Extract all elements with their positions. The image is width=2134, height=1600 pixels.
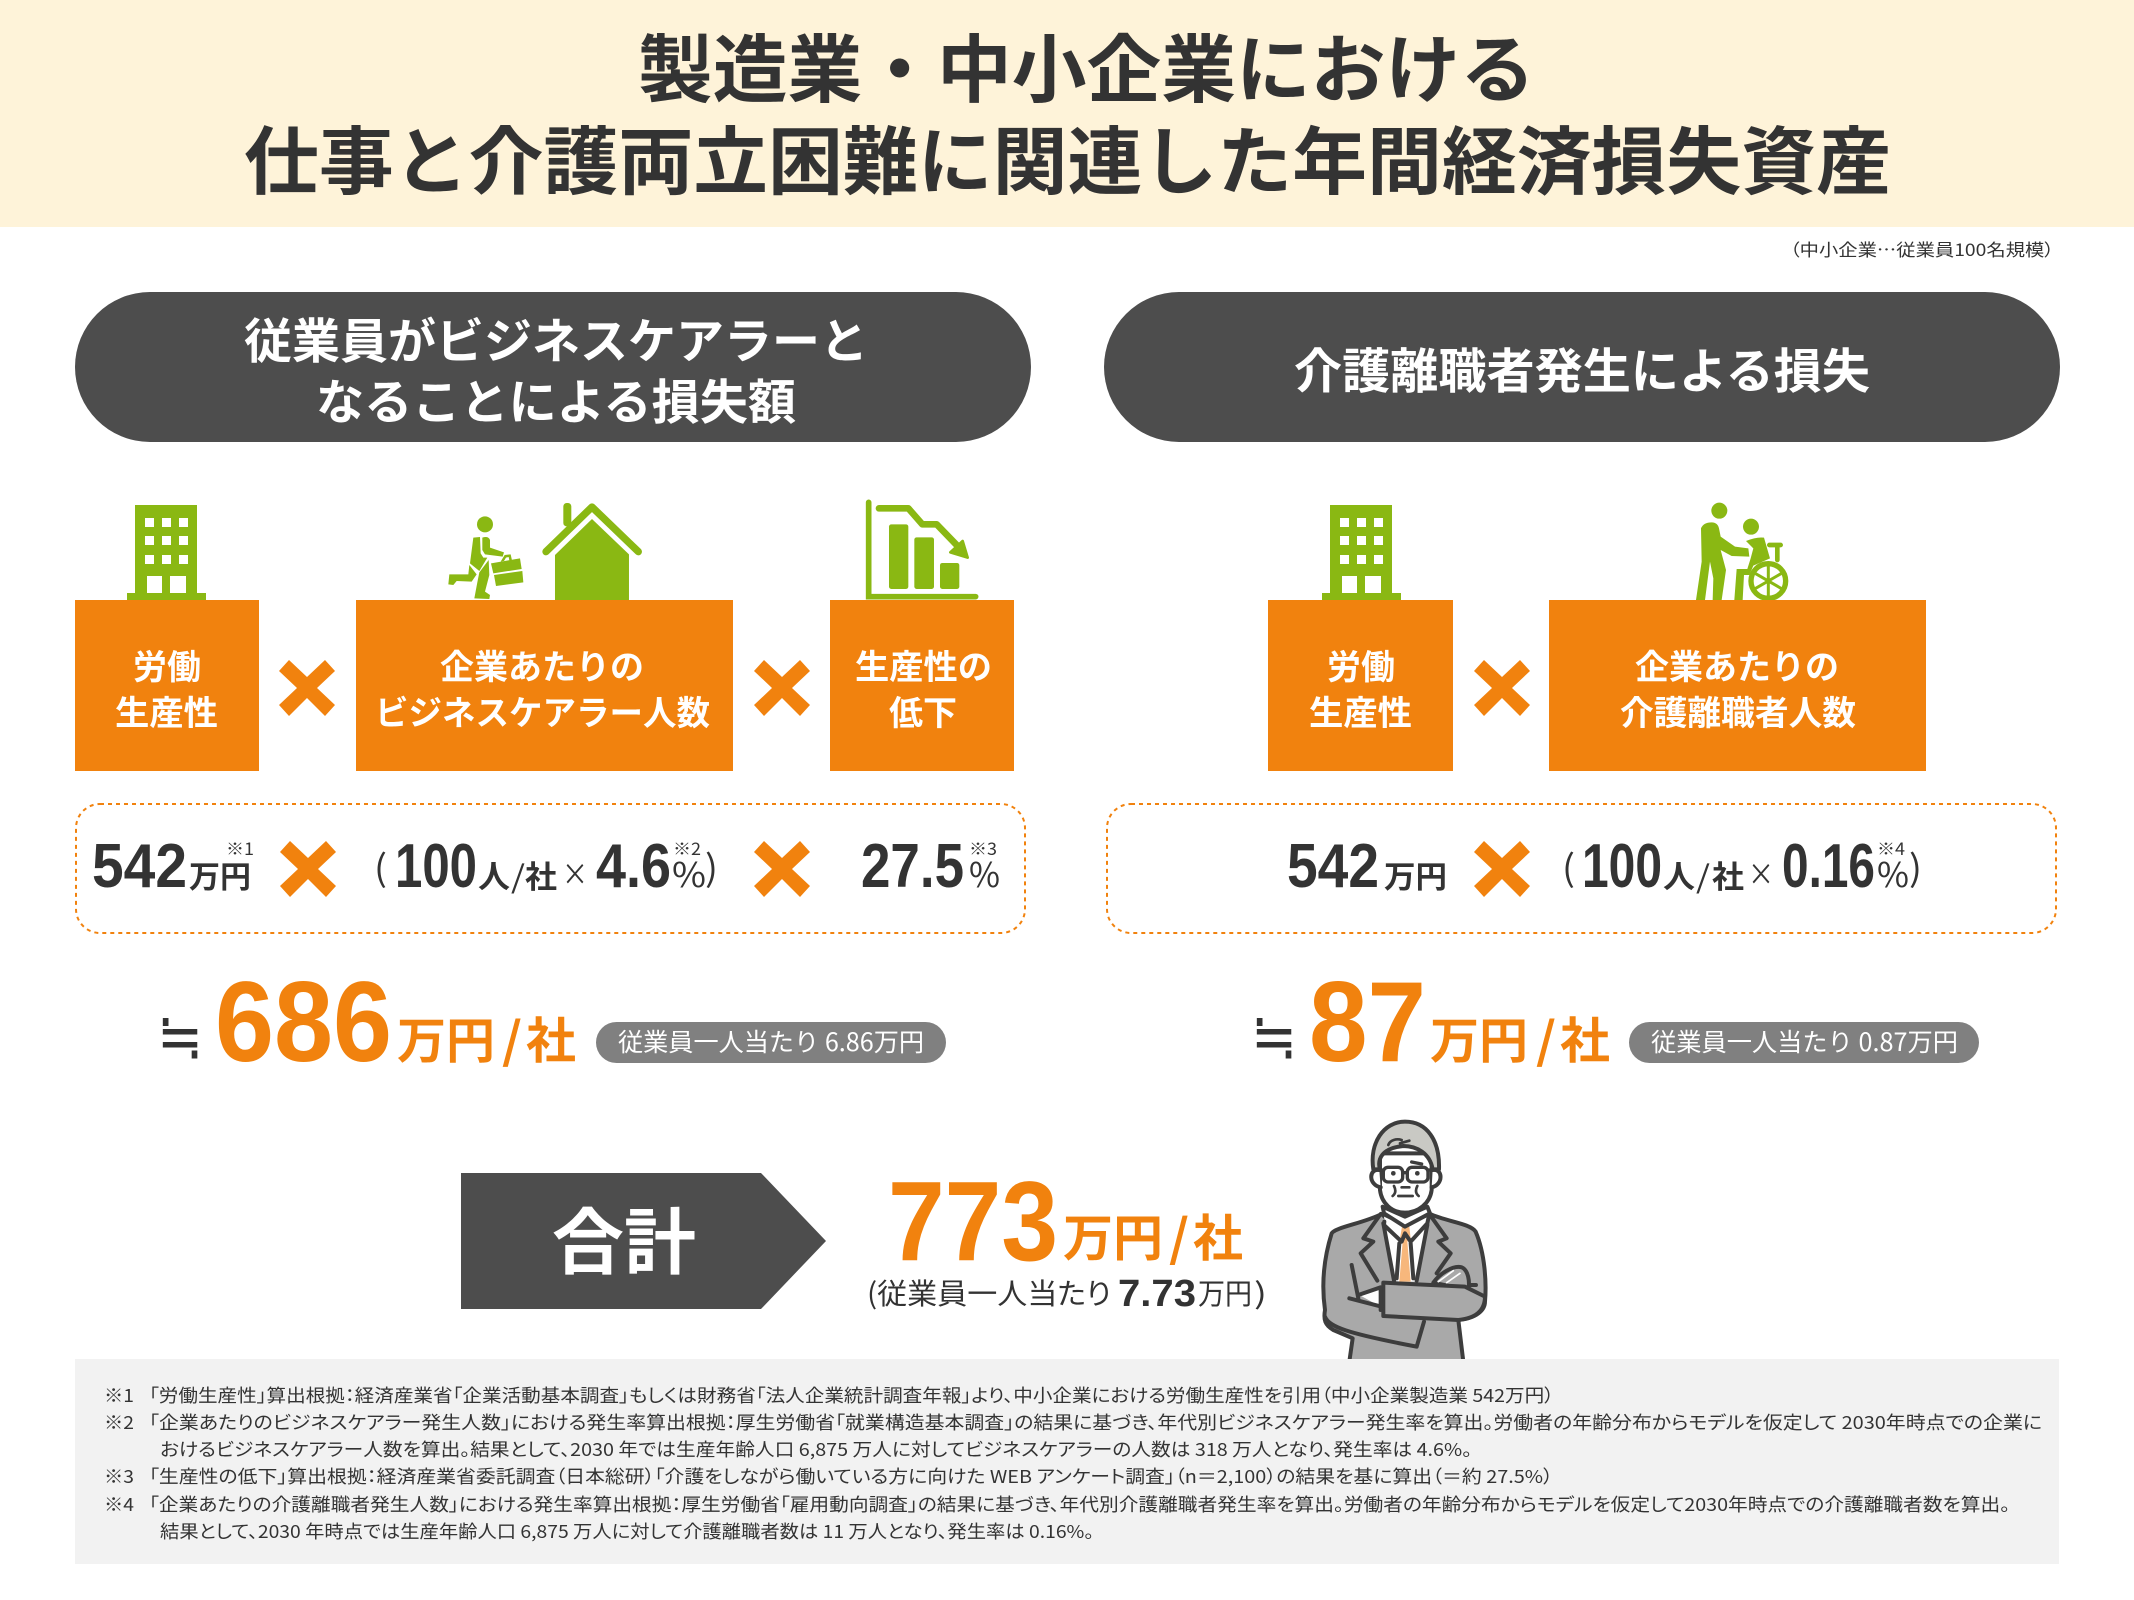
formula values: / <box>1696 852 1710 897</box>
result: 686 per company <box>157 959 576 1086</box>
result: 87 per company <box>1251 959 1610 1086</box>
heading pill: turnover <box>1104 292 2060 442</box>
factor box: business carers per company: 企業あたりの <box>440 640 644 689</box>
factor box: labour productivity <box>1268 600 1453 771</box>
result: 87 per company: ≒ <box>1251 984 1297 1078</box>
formula values: % <box>969 848 1000 897</box>
heading pill: business carer: なることによる損失額 <box>316 363 796 433</box>
icon: house <box>546 503 638 601</box>
formula values: ※3 <box>969 835 997 860</box>
formula values: 0.16 <box>1782 832 1875 901</box>
icon: office building <box>1322 505 1401 600</box>
formula values: % <box>1877 848 1909 897</box>
illustration: businessman with arms crossed <box>1323 1122 1486 1362</box>
result: 87 per company: 87 <box>1309 959 1426 1086</box>
footnotes: 「企業あたりのビジネスケアラー発生人数」における発生率算出根拠：厚生労働省「就業構造基本調査」の結果に基づき、年代別ビジネスケアラー発生率を算出。労働者の年齢分布からモデルを仮定して 2030年時点での企業に <box>149 1409 2042 1435</box>
hair <box>1373 1122 1439 1169</box>
formula values: 万円 <box>189 852 251 897</box>
total value: 社 <box>1193 1199 1243 1271</box>
formula values: 100 <box>1582 832 1662 901</box>
multiply sign <box>754 660 810 716</box>
footnotes: ※3 <box>104 1463 134 1489</box>
total per employee: (従業員一人当たり <box>867 1271 1111 1313</box>
icon: wheelchair care <box>1696 503 1786 600</box>
formula values <box>1287 832 1922 901</box>
formula values: 万円 <box>1384 852 1447 897</box>
cuff and left arm <box>1359 1287 1381 1307</box>
footnotes <box>75 1359 2059 1564</box>
hand <box>1433 1267 1469 1290</box>
total per employee: 7.73 <box>1118 1273 1196 1315</box>
formula values: 100 <box>395 832 477 901</box>
total per employee: 万円 <box>1198 1271 1252 1313</box>
total arrow: 合計 <box>552 1184 696 1289</box>
formula values: ※4 <box>1877 835 1905 860</box>
footnotes: 「生産性の低下」算出根拠：経済産業省委託調査（日本総研）「介護をしながら働いている方に向けた WEB アンケート調査」（n＝2,100）の結果を基に算出（＝約 27.5%） <box>149 1463 1553 1489</box>
lapels <box>1361 1214 1451 1281</box>
neck and face <box>1383 1207 1430 1227</box>
result: 87 per company: 万円 <box>1430 1002 1528 1073</box>
factor box: turnover per company: 企業あたりの <box>1635 640 1839 689</box>
tie <box>1399 1227 1411 1282</box>
total per employee <box>867 1271 1267 1315</box>
total value <box>888 1158 1243 1284</box>
footnotes: おけるビジネスケアラー人数を算出。結果として、2030 年では生産年齢人口 6,875 万人に対してビジネスケアラーの人数は 318 万人となり、発生率は 4.6%。 <box>160 1436 1472 1462</box>
icon: declining chart <box>869 502 976 597</box>
result: 87 per company: 社 <box>1560 1002 1610 1073</box>
heading pill: business carer <box>75 292 1031 442</box>
formula values: / <box>511 852 525 897</box>
result: 686 per company: ≒ <box>157 984 203 1078</box>
footnotes: 「労働生産性」算出根拠：経済産業省「企業活動基本調査」もしくは財務省「法人企業統計調査年報」より、中小企業における労働生産性を引用（中小企業製造業 542万円） <box>149 1382 1554 1408</box>
forearm <box>1383 1283 1485 1320</box>
total value: 773 <box>888 1158 1058 1284</box>
total value: 万円 <box>1063 1199 1163 1271</box>
footnotes: ※2 <box>104 1409 134 1435</box>
formula values: 27.5 <box>861 832 964 901</box>
factor box: business carers per company <box>356 600 733 771</box>
factor box: labour productivity: 生産性 <box>115 686 218 735</box>
factor box: productivity drop <box>830 600 1014 771</box>
total value: / <box>1169 1199 1189 1271</box>
dashed formula box <box>1107 804 2056 933</box>
formula values: ※1 <box>226 835 254 860</box>
icon: worker with bag <box>448 516 523 599</box>
formula values: 社 <box>525 852 557 897</box>
result: 686 per company: 万円 <box>397 1002 495 1073</box>
formula values: × <box>1748 850 1774 894</box>
formula values: ※2 <box>673 835 701 860</box>
factor box: business carers per company: ビジネスケアラー人数 <box>375 686 710 735</box>
formula values: ) <box>705 840 718 892</box>
multiply sign <box>1474 660 1530 716</box>
title: 仕事と介護両立困難に関連した年間経済損失資産 <box>244 103 1891 210</box>
heading pill: turnover: 介護離職者発生による損失 <box>1294 332 1870 402</box>
footnotes: 結果として、2030 年時点では生産年齢人口 6,875 万人に対して介護離職者数は 11 万人となり、発生率は 0.16%。 <box>160 1518 1094 1544</box>
result: 686 per company: 686 <box>215 959 392 1086</box>
formula values: × <box>562 850 588 894</box>
per-employee pill: 従業員一人当たり 0.87万円 <box>1651 1023 1958 1059</box>
glasses <box>1383 1167 1403 1182</box>
shirt <box>1384 1217 1428 1282</box>
formula values: % <box>672 848 706 897</box>
jacket <box>1323 1214 1486 1362</box>
factor box: productivity drop: 生産性の <box>855 640 992 689</box>
title <box>244 11 1891 210</box>
result: 686 per company: / <box>502 1002 522 1073</box>
formula values: ) <box>1909 840 1922 892</box>
factor box: labour productivity: 生産性 <box>1309 686 1412 735</box>
heading pill: business carer: 従業員がビジネスケアラーと <box>244 302 868 372</box>
per-employee pill: 従業員一人当たり 6.86万円 <box>618 1023 924 1059</box>
result: 686 per company: 社 <box>526 1002 576 1073</box>
mouth and wrinkles <box>1393 1186 1419 1196</box>
result: 87 per company: / <box>1536 1002 1556 1073</box>
factor box: labour productivity <box>75 600 259 771</box>
footnotes: ※1 <box>104 1382 134 1408</box>
formula values: ( <box>1562 840 1575 892</box>
formula values <box>92 832 1000 901</box>
formula values: 542 <box>1287 832 1379 901</box>
footnotes: ※4 <box>104 1491 134 1517</box>
formula values: 人 <box>478 852 510 897</box>
formula values: 4.6 <box>596 832 671 901</box>
factor box: turnover per company: 介護離職者人数 <box>1620 686 1856 735</box>
total arrow <box>461 1173 826 1309</box>
formula values: 人 <box>1663 852 1695 897</box>
formula values: 542 <box>92 832 187 901</box>
dashed formula box <box>76 804 1025 933</box>
total per employee: ) <box>1254 1271 1267 1313</box>
note: company size: （中小企業…従業員100名規模） <box>1790 236 2054 261</box>
factor box: productivity drop: 低下 <box>889 686 957 735</box>
panel: business carer loss <box>75 292 1031 1086</box>
factor box: labour productivity: 労働 <box>1327 640 1395 689</box>
icon: office building <box>127 505 206 600</box>
factor box: turnover per company <box>1549 600 1926 771</box>
header band <box>0 0 2134 227</box>
title: 製造業・中小企業における <box>638 11 1535 118</box>
panel: caregiving turnover loss <box>1104 292 2060 1086</box>
factor box: labour productivity: 労働 <box>133 640 201 689</box>
formula values: 社 <box>1712 852 1744 897</box>
footnotes: 「企業あたりの介護離職者発生人数」における発生率算出根拠：厚生労働省「雇用動向調査」の結果に基づき、年代別介護離職者発生率を算出。労働者の年齢分布からモデルを仮定して2030年時点での介護離職者数を算出。 <box>149 1491 2010 1517</box>
formula values: ( <box>374 840 387 892</box>
ears <box>1371 1170 1441 1187</box>
multiply sign <box>279 660 335 716</box>
